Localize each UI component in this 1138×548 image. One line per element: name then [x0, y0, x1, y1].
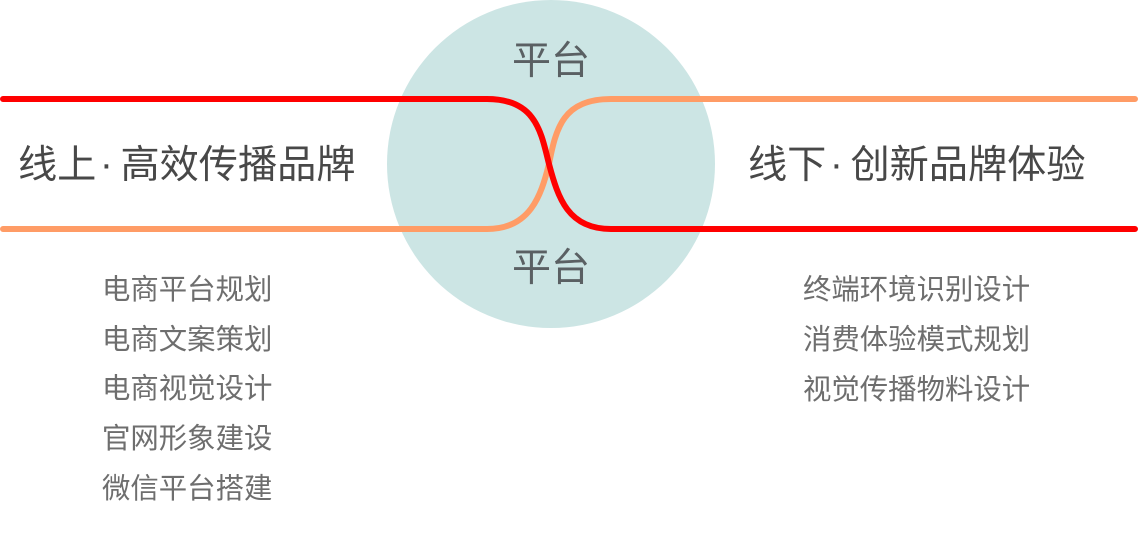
list: offline services: [803, 274, 1030, 406]
platform circle: [387, 0, 715, 328]
list: online services: 微信平台搭建: [102, 473, 272, 505]
label: platform top: 平台: [512, 40, 590, 83]
list: online services: 官网形象建设: [102, 423, 272, 455]
red line: [3, 99, 1135, 229]
orange line: [3, 99, 1135, 229]
list: offline services: 终端环境识别设计: [803, 274, 1030, 306]
heading: online: 线上·高效传播品牌: [18, 143, 356, 187]
label: platform bottom: 平台: [512, 247, 590, 290]
list: offline services: 视觉传播物料设计: [803, 374, 1030, 406]
list: online services: 电商文案策划: [102, 324, 272, 356]
list: online services: 电商视觉设计: [102, 373, 272, 405]
list: online services: [102, 274, 272, 505]
list: offline services: 消费体验模式规划: [803, 324, 1030, 356]
heading: offline: 线下·创新品牌体验: [748, 143, 1086, 187]
list: online services: 电商平台规划: [102, 274, 272, 306]
